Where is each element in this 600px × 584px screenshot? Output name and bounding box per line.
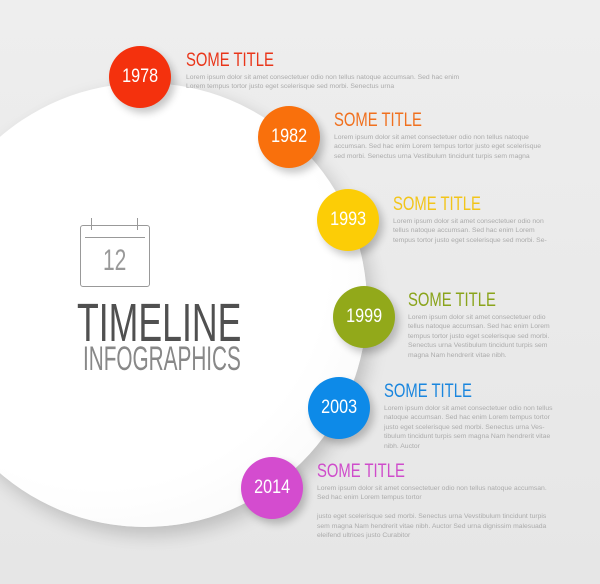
- text 1999: [408, 290, 550, 359]
- text 1982: Lorem ipsum dolor sit amet consectetuer odio non tellus natoque accumsan. Sed hac enim Lorem tempus tortor justo eget scelerisque sed morbi. Senectus urna Vestibulum tincidunt turpis sem magna: [334, 134, 541, 160]
- bubble 2014: [241, 457, 303, 519]
- big white disk: [0, 83, 367, 527]
- text 2014: justo eget scelerisque sed morbi. Senectus urna Vevstibulum tincidunt turpis sem magna Nam hendrerit vitae nibh. Auctor Sed urna dignissim malesuada eleifend ultrices justo Curabitor: [317, 513, 546, 539]
- bubble 1999: [333, 286, 395, 348]
- text 1982: [334, 110, 541, 160]
- bubble 1982: 1982: [271, 126, 307, 147]
- bubble 1978: [109, 46, 171, 108]
- title: TIMELINE: TIMELINE: [77, 293, 241, 353]
- text 1999: SOME TITLE: [408, 290, 496, 311]
- bubble 2003: 2003: [321, 397, 357, 418]
- text 1993: SOME TITLE: [393, 194, 481, 215]
- text 1993: Lorem ipsum dolor sit amet consectetuer odio non tellus natoque accumsan. Sed hac enim Lorem tempus tortor justo eget scelerisque sed morbi. Se-: [393, 218, 547, 244]
- bubble 1978: 1978: [122, 66, 158, 87]
- text 2003: [384, 381, 552, 450]
- text 2014: [316, 461, 547, 539]
- text 2003: SOME TITLE: [384, 381, 472, 402]
- bubble 1993: 1993: [330, 209, 366, 230]
- bubble 1982: [258, 106, 320, 168]
- bubble 1999: 1999: [346, 306, 382, 327]
- bubble 2003: [308, 377, 370, 439]
- bubble 1993: [317, 189, 379, 251]
- text 1978: SOME TITLE: [186, 50, 274, 71]
- text 2003: Lorem ipsum dolor sit amet consectetuer odio non tellus natoque accumsan. Sed hac enim Lorem tempus tortor justo eget scelerisque sed morbi. Senectus urna Ves-tibulum tincidunt turpis sem magna Nam hendrerit vitae nibh. Auctor: [384, 405, 552, 450]
- text 1993: [393, 194, 547, 244]
- text 1999: Lorem ipsum dolor sit amet consectetuer odio tellus natoque accumsan. Sed hac enim Lorem tempus tortor justo eget scelerisque sed morbi. Senectus urna Vestibulum tincidunt turpis sem magna Nam hendrerit vitae nibh.: [408, 314, 550, 359]
- text 1982: SOME TITLE: [334, 110, 422, 131]
- text 1978: Lorem ipsum dolor sit amet consectetuer odio non tellus natoque accumsan. Sed hac enim Lorem tempus tortor justo eget scelerisque sed morbi. Senectus urna: [186, 74, 459, 90]
- icon: calendar: [80, 225, 150, 287]
- text 2014: Lorem ipsum dolor sit amet consectetuer odio non tellus natoque accumsan. Sed hac enim Lorem tempus tortor: [317, 485, 547, 501]
- bubble 2014: 2014: [254, 477, 290, 498]
- text 1978: [186, 50, 459, 90]
- icon: calendar: 12: [103, 244, 126, 277]
- subtitle: INFOGRAPHICS: INFOGRAPHICS: [83, 340, 241, 378]
- text 2014: SOME TITLE: [317, 461, 405, 482]
